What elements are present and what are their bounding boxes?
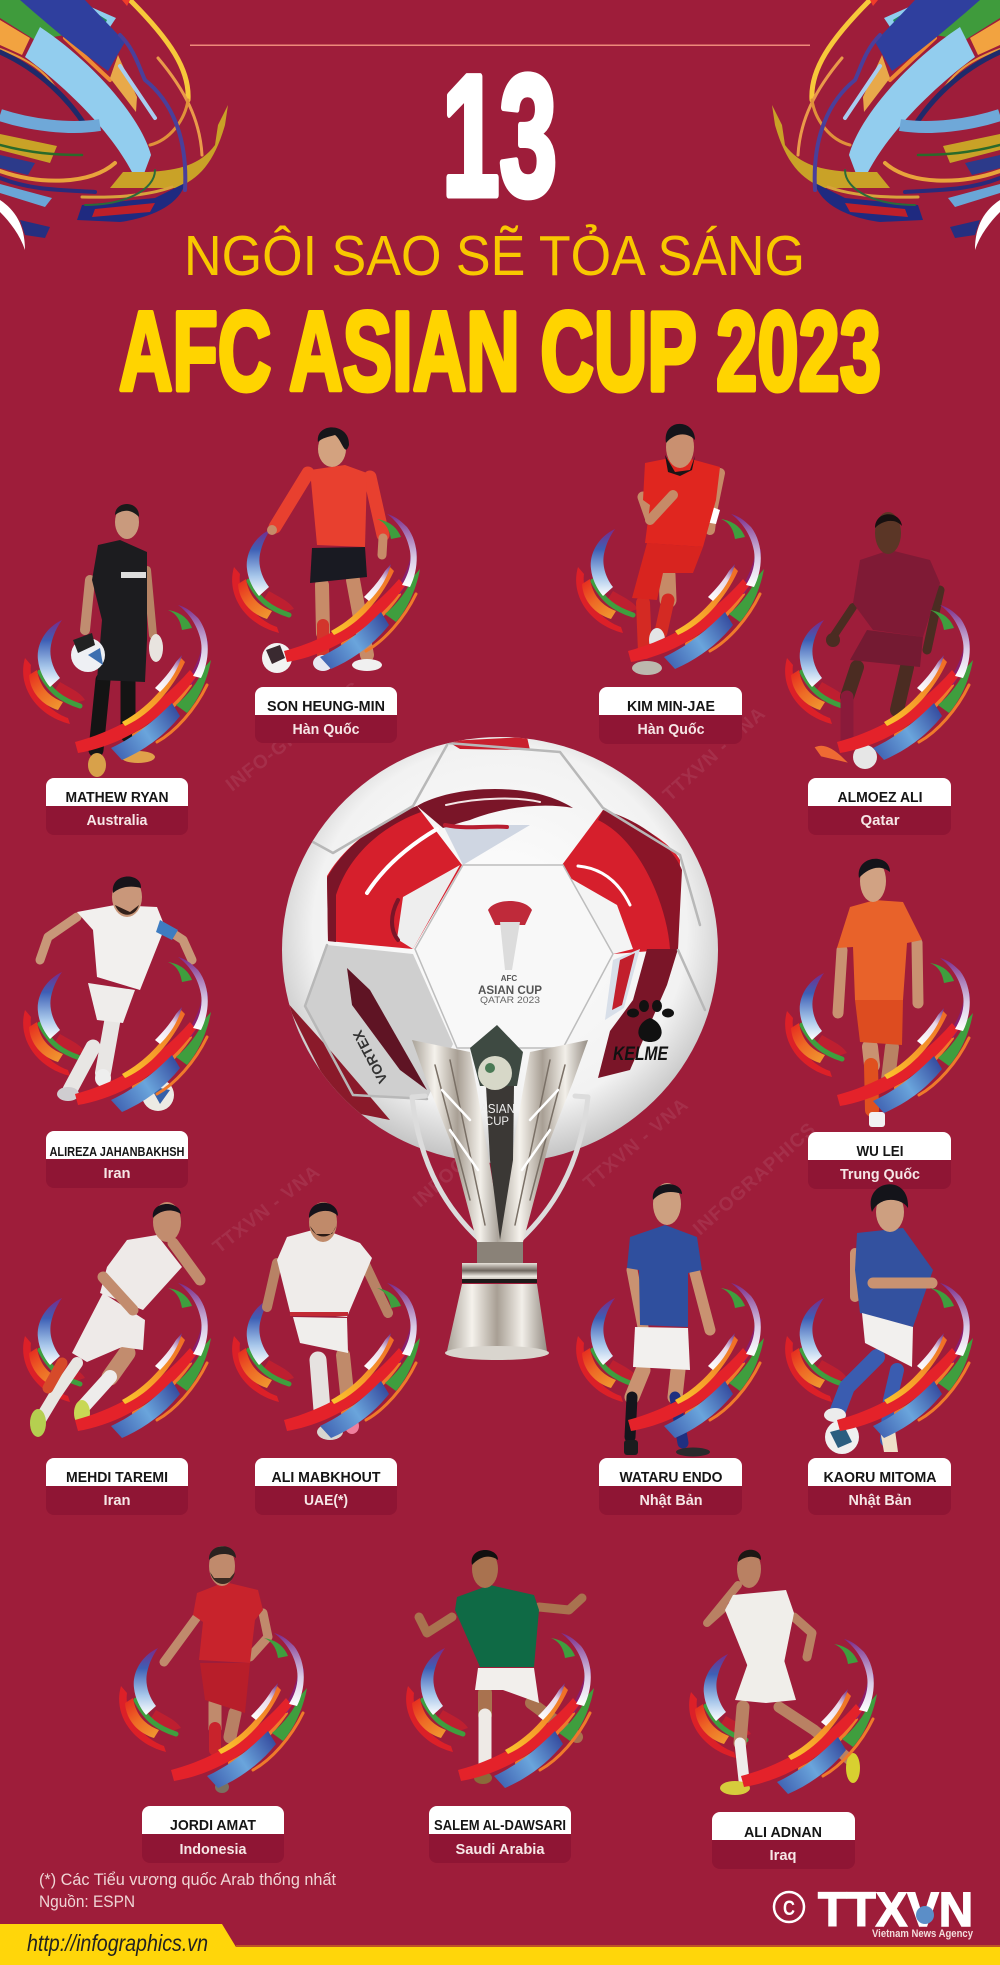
footer band [0,1924,1000,1965]
lower right panel with Kelme [598,949,678,1078]
watermarks: INFO-GRAPHICS [222,678,365,796]
label: Jordi Amat: JORDI AMAT [170,1817,256,1834]
label: Ali Mabkhout: ALI MABKHOUT [272,1469,380,1486]
player: Alireza Jahanbakhsh [23,877,211,1188]
label: Jordi Amat [142,1806,284,1863]
figure: Ali Mabkhout [267,1202,388,1440]
label: Wataru Endo [599,1458,742,1515]
copyright logo TTXVN: C [783,1897,795,1920]
title number 13: 13 [442,40,557,232]
label: Ali Adnan: Iraq [770,1847,796,1864]
figure: Mehdi Taremi [30,1202,200,1437]
figure: Salem Al-Dawsari [419,1550,582,1784]
figure: Kaoru Mitoma [824,1184,933,1454]
figure: Wu Lei [837,859,922,1127]
label: Mathew Ryan: Australia [86,812,148,829]
label: Ali Adnan [712,1812,855,1869]
watermarks: INFOGRAPHICS [689,1119,821,1240]
figure: Wataru Endo [624,1183,710,1456]
label: Kim Min-jae: KIM MIN-JAE [627,698,715,715]
figure: Mathew Ryan [71,504,163,777]
label: Mathew Ryan: MATHEW RYAN [66,789,168,806]
player: Kaoru Mitoma [785,1184,973,1515]
football [282,737,718,1163]
player: Ali Adnan [689,1550,877,1869]
watermarks: INFOGRAPHICS [409,1091,541,1212]
label: Kim Min-jae [599,687,742,744]
asian cup logo on ball: ASIAN CUP [478,983,542,997]
label: Mathew Ryan [46,778,188,835]
label: Son Heung-min: Hàn Quốc [292,721,360,738]
lower left grey panel: VORTEX [349,1027,391,1086]
player: Almoez Ali [785,512,973,835]
label: Jordi Amat: Indonesia [180,1841,247,1858]
asian cup logo on ball: QATAR 2023 [480,995,540,1005]
footer url: http://infographics.vn [27,1930,208,1956]
label: Kaoru Mitoma: Nhật Bản [848,1492,912,1509]
label: Wu Lei: WU LEI [856,1143,904,1160]
trophy engraving: ASIAN [480,1101,515,1116]
figure: Almoez Ali [817,512,940,769]
player: Mehdi Taremi [23,1202,211,1515]
watermarks: TTXVN - VNA [659,703,770,806]
trophy: CUP [485,1114,509,1128]
seams [305,743,705,1099]
figure: Son Heung-min [262,427,383,673]
watermarks [209,678,821,1258]
label: Mehdi Taremi: Iran [104,1492,130,1509]
source: Nguồn: ESPN [39,1892,135,1911]
player: Jordi Amat [119,1546,307,1863]
player: Wu Lei [785,859,973,1189]
central pentagon [415,865,613,1048]
corner decoration: top left [0,0,228,250]
label: Wu Lei: Trung Quốc [840,1166,920,1183]
label: Kaoru Mitoma [808,1458,951,1515]
label: Son Heung-min [255,687,397,743]
corner decoration: top right [772,0,1000,250]
label: Salem Al-Dawsari: Saudi Arabia [456,1841,545,1858]
label: Alireza Jahanbakhsh: Iran [104,1165,130,1182]
label: Alireza Jahanbakhsh: ALIREZA JAHANBAKHSH [50,1145,184,1159]
watermarks: TTXVN - VNA [580,1094,693,1194]
title line 2: NGÔI SAO SẼ TỎA SÁNG [184,223,805,288]
label: Almoez Ali: ALMOEZ ALI [838,789,922,806]
figure: Alireza Jahanbakhsh [40,877,192,1111]
label: Ali Adnan: ALI ADNAN [744,1824,822,1841]
label: Son Heung-min: SON HEUNG-MIN [267,698,385,715]
label: Kaoru Mitoma: KAORU MITOMA [824,1469,937,1486]
label: Ali Mabkhout [255,1458,397,1515]
label: Wataru Endo: Nhật Bản [640,1492,702,1509]
top panel [417,737,573,865]
figure: Ali Adnan [707,1550,860,1795]
asian cup logo on ball: AFC [501,974,517,983]
asian cup logo on ball [478,901,542,1005]
label: Wataru Endo: WATARU ENDO [620,1469,723,1486]
player: Ali Mabkhout [232,1202,420,1515]
watermarks: TTXVN - VNA [209,1161,325,1258]
player: Kim Min-jae [576,424,764,744]
label: Kim Min-jae: Hàn Quốc [638,721,704,738]
heading block [119,40,881,414]
copyright logo TTXVN: Vietnam News Agency [872,1928,974,1940]
kelme logo [613,1000,674,1065]
label: Ali Mabkhout: UAE(*) [304,1492,348,1509]
player: Son Heung-min [232,427,420,743]
kelme logo: KELME [613,1044,669,1065]
left red panel [327,806,462,949]
figure: Jordi Amat [164,1546,268,1793]
label: Salem Al-Dawsari: SALEM AL-DAWSARI [434,1817,566,1834]
label: Almoez Ali [808,778,951,835]
label: Mehdi Taremi: MEHDI TAREMI [66,1469,168,1486]
label: Salem Al-Dawsari [429,1806,571,1863]
label: Alireza Jahanbakhsh [46,1131,188,1188]
player: Wataru Endo [576,1183,764,1515]
label: Mehdi Taremi [46,1458,188,1515]
label: Almoez Ali: Qatar [860,812,900,829]
right red panel [562,810,682,954]
player: Salem Al-Dawsari [406,1550,594,1863]
trophy [412,1025,588,1360]
figure: Kim Min-jae [632,424,720,675]
player: Mathew Ryan [23,504,211,835]
lower left grey panel [285,945,453,1120]
footnote: (*) Các Tiểu vương quốc Arab thống nhất [39,1870,336,1889]
label: Wu Lei [808,1132,951,1189]
copyright logo TTXVN: TTXVN [818,1884,973,1937]
